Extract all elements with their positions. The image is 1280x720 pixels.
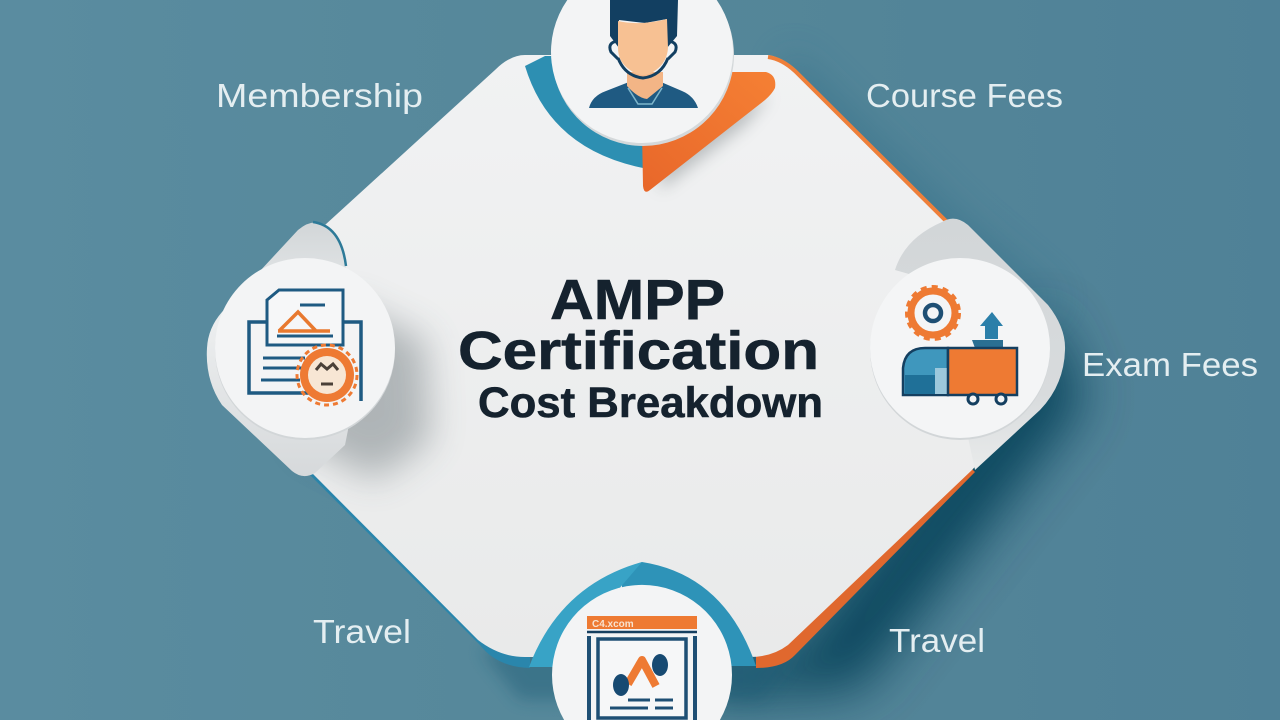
title: Cost Breakdown <box>478 379 823 427</box>
icon: documents with seal <box>249 290 361 405</box>
node: exam equipment icon circle <box>870 258 1050 440</box>
panel surface <box>312 55 1000 657</box>
icon: chart window <box>587 616 697 720</box>
node: document and seal icon circle <box>215 258 395 440</box>
label: exam fees: Exam Fees <box>1082 346 1258 383</box>
node: report chart icon circle <box>552 585 732 720</box>
accent: lower left blue edge <box>310 470 530 668</box>
icon: chart window: C4.xcom <box>592 619 634 630</box>
label: membership: Membership <box>216 77 423 114</box>
bottom segment: blue arc <box>529 562 756 667</box>
shadow beneath left node on panel <box>300 300 430 480</box>
label: course fees: Course Fees <box>866 77 1063 114</box>
title: AMPP <box>550 268 725 332</box>
accent: lower right orange edge <box>756 465 975 668</box>
panel: central octagon <box>310 55 1000 668</box>
left tab behind circle <box>207 222 348 476</box>
icon: gear, arrow and cart <box>903 287 1017 404</box>
top segment: blue arc and orange pointer <box>525 56 775 192</box>
right tab behind circle <box>895 219 1065 470</box>
accent: left tab teal arc <box>313 222 346 266</box>
title: Certification <box>458 321 819 381</box>
node: membership person icon circle <box>551 0 734 146</box>
accent: upper right orange edge <box>768 57 946 221</box>
title <box>458 268 823 427</box>
label: travel right: Travel <box>889 622 985 659</box>
label: travel left: Travel <box>313 613 411 650</box>
icon: person <box>589 0 698 108</box>
